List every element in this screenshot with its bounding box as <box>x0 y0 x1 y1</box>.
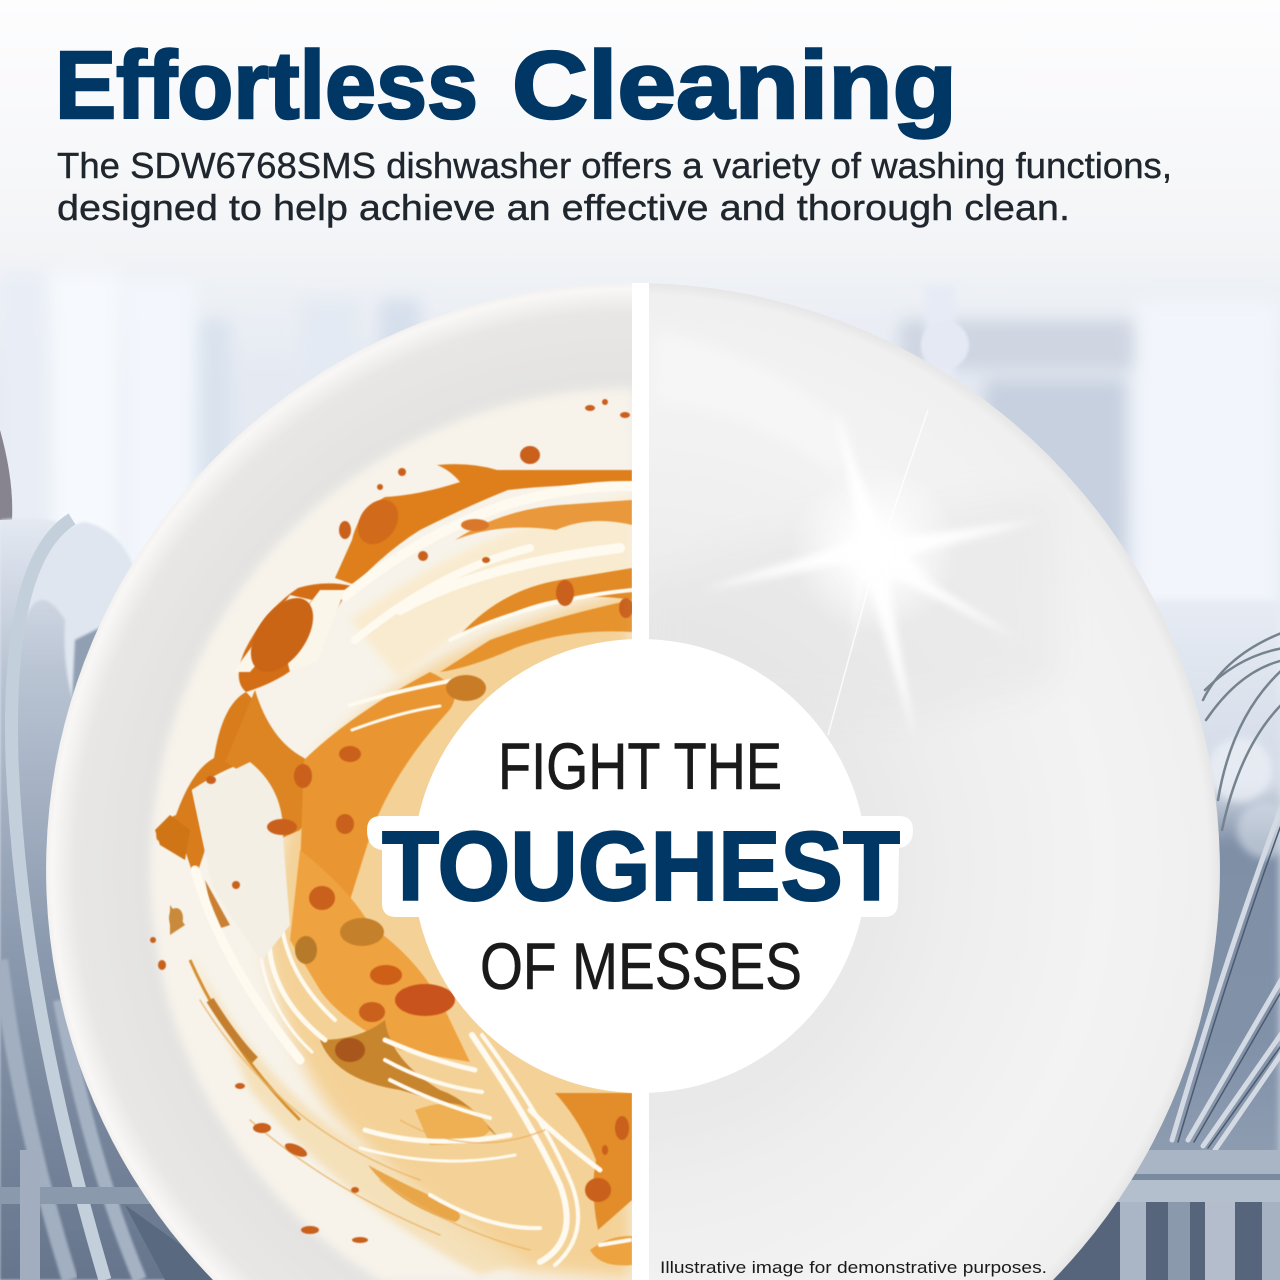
white plate patches <box>192 590 345 960</box>
main orange streaks <box>155 464 632 1265</box>
header: description: designed to help achieve an effective and thorough clean. <box>57 187 1070 228</box>
vertical divider <box>632 283 649 1280</box>
plate: dirty left half <box>46 283 633 1280</box>
header: title: Effortless <box>55 32 478 139</box>
lower rack <box>1040 1150 1280 1280</box>
glass plates in left rack <box>0 430 230 1280</box>
header: description <box>57 145 1172 228</box>
plate: clean right half <box>649 283 1220 1280</box>
header: title: Cleaning <box>512 32 957 139</box>
whisk utensils at right <box>1149 602 1280 1150</box>
central callout badge: OF MESSES <box>480 929 802 1003</box>
header: description: The SDW6768SMS dishwasher offers a variety of washing functions, <box>57 145 1172 186</box>
central callout badge: TOUGHEST <box>382 811 900 921</box>
central callout badge <box>367 639 913 1093</box>
cream swipe lines <box>195 486 632 1265</box>
header: title <box>55 32 957 139</box>
food soil <box>150 390 633 1280</box>
central callout badge: FIGHT THE <box>498 729 782 803</box>
sparkle <box>650 330 1060 740</box>
plate bowl <box>152 390 632 1280</box>
pale sauce wash <box>190 495 632 1280</box>
disclaimer: Illustrative image for demonstrative purposes. <box>660 1258 1047 1277</box>
sauce clumps <box>150 399 633 1243</box>
